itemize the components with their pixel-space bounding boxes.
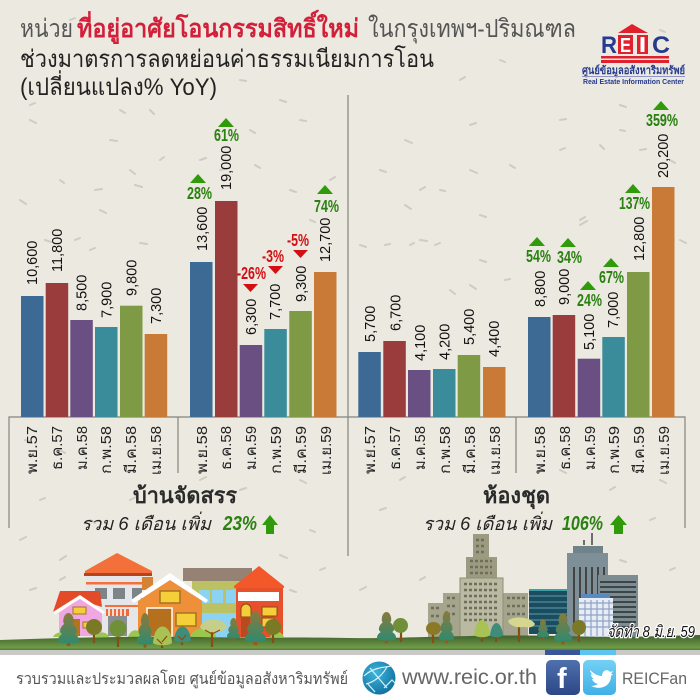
bar เม.ย.59 20,200: 20,200 [656, 134, 672, 178]
heading: ห้องชุด summary: รวม 6 เดือน เพิ่ม [423, 511, 553, 534]
month labels: บ้านจัดสรร: มี.ค.58 [123, 426, 140, 474]
bar ก.พ.59 7,700 [264, 284, 287, 417]
white house [84, 553, 153, 636]
bar เม.ย.59 12,700: 12,700 [318, 218, 334, 262]
ground [0, 635, 700, 650]
month labels: บ้านจัดสรร: ก.พ.59 [268, 426, 285, 474]
month labels: บ้านจัดสรร: ม.ค.59 [243, 426, 260, 470]
bar ธ.ค.58 9,000 [553, 269, 575, 417]
red building [234, 566, 284, 637]
month labels: ห้องชุด: เม.ย.59 [656, 426, 673, 475]
changes: ห้องชุด: 67% [599, 267, 624, 287]
month labels: บ้านจัดสรร: พ.ย.57 [24, 426, 41, 474]
month labels: ห้องชุด: พ.ย.57 [362, 426, 379, 474]
month labels: ห้องชุด: ม.ค.58 [412, 426, 429, 470]
bar ม.ค.58 8,500: 8,500 [74, 275, 90, 311]
changes: บ้านจัดสรร: 28% [187, 183, 212, 203]
month labels: บ้านจัดสรร: เม.ย.59 [318, 426, 335, 475]
title: หน่วย [20, 15, 73, 43]
bar พ.ย.58 13,600: 13,600 [195, 207, 211, 251]
bar มี.ค.59 9,300 [289, 266, 312, 417]
bar พ.ย.58 8,800: 8,800 [533, 271, 549, 307]
bar พ.ย.58 13,600 [190, 207, 212, 417]
logo: REIC: C [652, 32, 670, 59]
bar เม.ย.59 12,700 [314, 218, 336, 417]
green apartment [183, 568, 252, 637]
chart axes and dividers [9, 95, 685, 556]
chart: บ้านจัดสรร [21, 146, 336, 417]
heading: ห้องชุด summary: 106% [562, 513, 603, 535]
changes: ห้องชุด: 54% [526, 246, 551, 266]
bar พ.ย.57 5,700: 5,700 [363, 306, 379, 342]
bar ธ.ค.57 11,800 [46, 229, 68, 417]
bar ธ.ค.57 11,800: 11,800 [50, 229, 66, 272]
title: (เปลี่ยนแปลง% YoY) [20, 70, 217, 101]
changes: บ้านจัดสรร: 61% [214, 125, 239, 145]
month labels: ห้องชุด: ธ.ค.58 [557, 426, 574, 470]
month labels: ห้องชุด [362, 426, 673, 475]
bar ม.ค.58 8,500 [70, 275, 93, 417]
bar ม.ค.59 6,300 [240, 299, 262, 417]
changes: บ้านจัดสรร: -5% [287, 230, 309, 250]
bar ก.พ.59 7,000 [602, 292, 625, 417]
month labels: ห้องชุด: มี.ค.58 [462, 426, 479, 474]
illustration: houses [53, 553, 284, 637]
month labels: ห้องชุด: เม.ย.58 [487, 426, 504, 475]
changes: ห้องชุด: 24% [577, 290, 602, 310]
month labels: ห้องชุด: พ.ย.58 [532, 426, 549, 474]
trees: city side [377, 611, 586, 644]
bar ม.ค.58 4,100: 4,100 [413, 325, 429, 361]
heading: บ้านจัดสรร summary: รวม 6 เดือน เพิ่ม [81, 511, 212, 534]
bar พ.ย.57 5,700 [358, 306, 381, 417]
changes: บ้านจัดสรร: 74% [314, 196, 339, 216]
bar พ.ย.57 10,600: 10,600 [25, 241, 41, 285]
icon: globe [362, 662, 396, 694]
facebook / twitter name: REICFan [622, 669, 687, 688]
icon: facebook: f [557, 663, 567, 695]
month labels: บ้านจัดสรร: ก.พ.58 [98, 426, 115, 474]
logo: REIC: ศูนย์ข้อมูลอสังหาริมทรัพย์ [582, 64, 685, 78]
bar ธ.ค.58 9,000: 9,000 [557, 269, 573, 305]
month labels: บ้านจัดสรร: ม.ค.58 [74, 426, 91, 470]
bar ธ.ค.58 19,000 [215, 146, 238, 417]
orange house [131, 573, 208, 637]
title: ช่วงมาตรการลดหย่อนค่าธรรมเนียมการโอน [20, 45, 434, 73]
logo: REIC: R [601, 32, 617, 59]
pink house [53, 591, 105, 636]
changes: ห้องชุด [526, 101, 678, 310]
month labels: ห้องชุด: ก.พ.58 [437, 426, 454, 474]
month labels: บ้านจัดสรร: พ.ย.58 [194, 426, 211, 474]
changes: ห้องชุด: 359% [646, 110, 678, 130]
heading: บ้านจัดสรร summary [81, 483, 278, 535]
month labels: บ้านจัดสรร: ธ.ค.58 [218, 426, 235, 470]
bar มี.ค.59 12,800: 12,800 [632, 217, 648, 261]
title: ในกรุงเทพฯ-ปริมณฑล [368, 14, 576, 44]
month labels: บ้านจัดสรร [24, 426, 335, 475]
changes: บ้านจัดสรร: -26% [237, 263, 266, 283]
bar ม.ค.58 4,100 [408, 325, 430, 417]
chart: ห้องชุด [358, 134, 674, 417]
month labels: บ้านจัดสรร: เม.ย.58 [148, 426, 165, 475]
trees: houses side [58, 611, 281, 648]
website: www.reic.or.th [401, 666, 537, 689]
bar มี.ค.59 9,300: 9,300 [294, 266, 310, 302]
heading: บ้านจัดสรร summary: บ้านจัดสรร [133, 483, 237, 508]
bar มี.ค.58 9,800: 9,800 [124, 260, 140, 296]
changes: ห้องชุด: 34% [557, 247, 582, 267]
month labels: บ้านจัดสรร: ธ.ค.57 [49, 426, 66, 470]
bar เม.ย.58 7,300: 7,300 [149, 288, 165, 324]
logo: REIC: E [620, 35, 631, 57]
bar มี.ค.58 9,800 [120, 260, 142, 417]
changes: ห้องชุด: 137% [619, 193, 650, 213]
title [20, 9, 576, 101]
month labels: ห้องชุด: ม.ค.59 [582, 426, 599, 470]
bar ก.พ.58 7,900: 7,900 [100, 282, 116, 318]
heading: บ้านจัดสรร summary: 23% [222, 513, 257, 535]
bar เม.ย.58 7,300 [145, 288, 167, 417]
illustration: city buildings [428, 533, 638, 638]
logo: REIC: Real Estate Information Center [583, 77, 684, 86]
bar เม.ย.59 20,200 [652, 134, 674, 417]
changes: บ้านจัดสรร: -3% [262, 246, 284, 266]
month labels: ห้องชุด: ก.พ.59 [606, 426, 623, 474]
bar ม.ค.59 5,100 [578, 314, 600, 417]
bar ธ.ค.57 6,700: 6,700 [388, 295, 404, 331]
footer band [0, 650, 700, 700]
bar ก.พ.58 4,200: 4,200 [438, 324, 454, 360]
month labels: ห้องชุด: มี.ค.59 [631, 426, 648, 474]
bar ก.พ.58 7,900 [95, 282, 118, 417]
icon: facebook [546, 660, 580, 695]
bushes [53, 628, 284, 637]
bar มี.ค.58 5,400 [458, 309, 480, 417]
heading: ห้องชุด summary: ห้องชุด [483, 483, 550, 510]
bar พ.ย.58 8,800 [528, 271, 550, 417]
bar เม.ย.58 4,400 [483, 321, 506, 417]
bar ก.พ.59 7,000: 7,000 [606, 292, 622, 328]
bar ม.ค.59 6,300: 6,300 [244, 299, 260, 335]
bar พ.ย.57 10,600 [21, 241, 44, 417]
bar มี.ค.58 5,400: 5,400 [462, 309, 478, 345]
bar ก.พ.58 4,200 [433, 324, 456, 417]
bar ก.พ.59 7,700: 7,700 [268, 284, 284, 320]
month labels: ห้องชุด: ธ.ค.57 [387, 426, 404, 470]
changes: บ้านจัดสรร [187, 118, 339, 292]
footer credit: รวบรวมและประมวลผลโดย ศูนย์ข้อมูลอสังหาริมทรัพย์ [16, 669, 348, 689]
bar เม.ย.58 4,400: 4,400 [487, 321, 503, 357]
bar ธ.ค.58 19,000: 19,000 [219, 146, 235, 190]
heading: ห้องชุด summary [423, 483, 627, 535]
month labels: บ้านจัดสรร: มี.ค.59 [293, 426, 310, 474]
logo: REIC [582, 24, 685, 86]
title: ที่อยู่อาศัยโอนกรรมสิทธิ์ใหม่ [77, 9, 359, 45]
bar ธ.ค.57 6,700 [383, 295, 406, 417]
icon: twitter [583, 660, 616, 695]
bar ม.ค.59 5,100: 5,100 [582, 314, 598, 350]
bar มี.ค.59 12,800 [627, 217, 650, 417]
